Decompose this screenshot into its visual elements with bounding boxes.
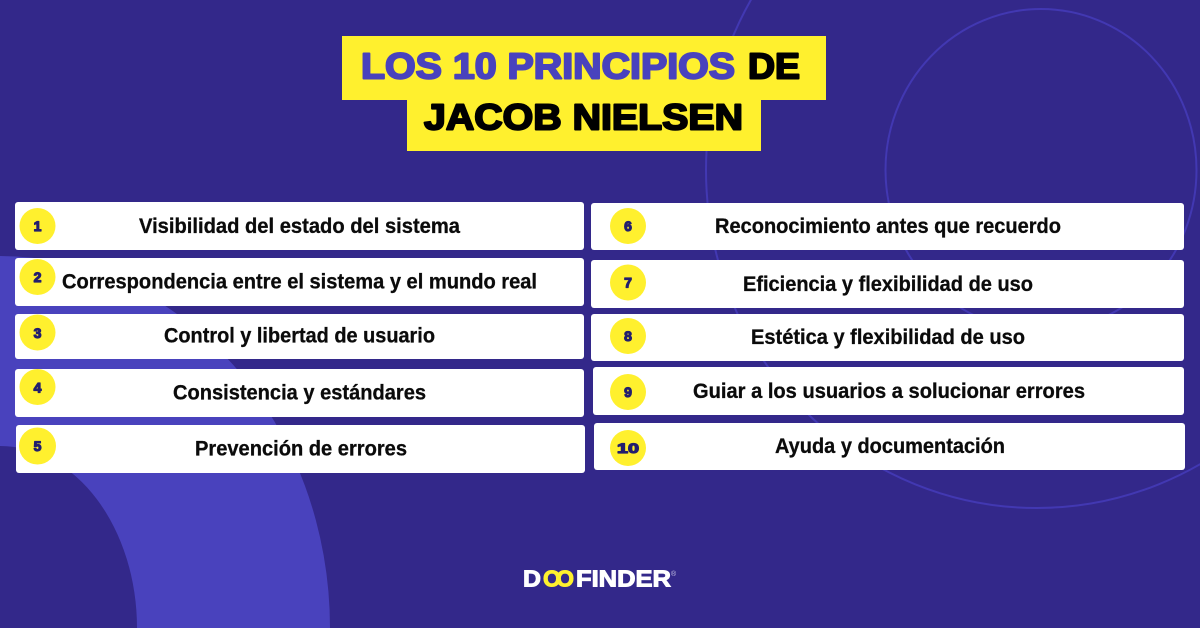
principle 6 <box>591 203 1184 250</box>
principle 7: 7 <box>624 274 632 290</box>
principle 5: 5 <box>34 438 42 454</box>
principle 1: Visibilidad del estado del sistema <box>139 215 460 238</box>
principle 5 <box>16 425 585 473</box>
principle 6: Reconocimiento antes que recuerdo <box>715 215 1061 238</box>
principle 6: 6 <box>624 218 632 234</box>
principle 8: Estética y flexibilidad de uso <box>751 326 1025 349</box>
principle 3: 3 <box>34 325 42 341</box>
principle 4: 4 <box>34 380 42 396</box>
title: LOS 10 PRINCIPIOS <box>361 46 735 86</box>
principle 9: Guiar a los usuarios a solucionar errores <box>693 380 1085 403</box>
principle 7 <box>591 260 1184 308</box>
logo: Doofinder: FINDER <box>576 566 671 592</box>
decorative small ring outline <box>886 9 1196 331</box>
principle 4 <box>15 369 584 417</box>
principle 10: 10 <box>617 440 639 456</box>
principle 9: 9 <box>624 384 632 400</box>
principle 9 <box>593 367 1184 415</box>
principle 2 <box>15 258 584 306</box>
principle 3 <box>15 314 584 359</box>
logo: Doofinder <box>523 566 677 592</box>
principle 10 <box>594 423 1185 470</box>
principle 2: 2 <box>34 269 42 285</box>
title: JACOB NIELSEN <box>424 96 743 138</box>
principle 4: Consistencia y estándares <box>173 382 426 404</box>
principle 3: Control y libertad de usuario <box>164 324 435 348</box>
principle 8 <box>591 314 1184 361</box>
principle 7: Eficiencia y flexibilidad de uso <box>743 273 1033 296</box>
principle 1 <box>15 202 584 250</box>
principle 8: 8 <box>624 328 632 344</box>
principle 2: Correspondencia entre el sistema y el mundo real <box>62 270 537 294</box>
decorative large ring outline <box>706 0 1200 508</box>
principle 10: Ayuda y documentación <box>775 435 1005 458</box>
decorative purple arc, bottom left <box>0 256 330 628</box>
principle 5: Prevención de errores <box>195 438 407 460</box>
principle 1: 1 <box>34 218 42 234</box>
logo: Doofinder: OO <box>543 566 574 592</box>
title: DE <box>748 46 800 86</box>
logo: Doofinder: ® <box>671 570 677 578</box>
logo: Doofinder: D <box>523 566 541 592</box>
title <box>342 36 826 151</box>
